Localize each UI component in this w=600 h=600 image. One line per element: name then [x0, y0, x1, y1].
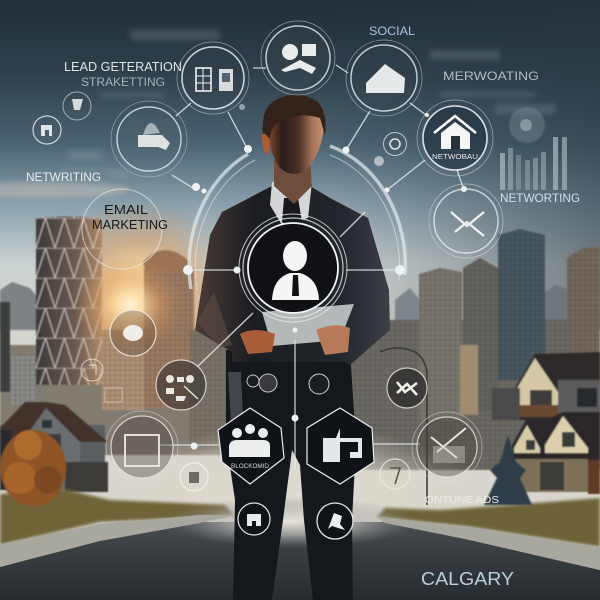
right houses: [492, 352, 600, 494]
bar chart: [500, 137, 567, 190]
upper house: [492, 352, 600, 420]
left house: [0, 402, 108, 492]
small node: upper left: [63, 92, 91, 120]
buildings right: [419, 229, 600, 420]
connector lines: [160, 65, 464, 470]
label: social: SOCIAL: [369, 26, 416, 38]
globe icon: [509, 107, 545, 143]
road: [0, 496, 600, 600]
building: saucer tower: [143, 250, 194, 408]
connector nodes: [183, 104, 467, 450]
label: networking left: NETWRITING: [26, 172, 101, 184]
inner arc: [195, 155, 400, 290]
label: inner: NETWOBAU: [432, 152, 478, 161]
legs: [226, 350, 356, 600]
label: email marketing: EMAIL: [104, 202, 148, 217]
distant mountains: [0, 282, 600, 330]
large arc: [189, 146, 405, 289]
building: diamond tower: [36, 216, 102, 385]
small node: right top: [384, 132, 406, 156]
torso and arms: [195, 186, 390, 365]
label: networking right: NETWORTING: [500, 193, 580, 205]
icon: flow: [166, 375, 198, 401]
icon: person: [272, 241, 319, 300]
grass left: [0, 488, 235, 545]
node: lead generation: [177, 42, 249, 114]
city skyline: [0, 216, 600, 470]
neck: [274, 160, 312, 204]
label: email marketing: MARKETING: [92, 217, 168, 232]
fir tree: [484, 435, 532, 505]
sidewalk right: [377, 517, 600, 570]
node: workflow: [156, 360, 206, 410]
node: bottom left: [238, 503, 270, 535]
decorative data scribbles: upper left: [62, 30, 555, 178]
small line icon: [105, 388, 122, 402]
central profile badge: [239, 214, 347, 322]
grass right: [377, 498, 600, 547]
icon: key: [41, 125, 52, 136]
hand left: [240, 330, 275, 354]
node: left middle: [111, 101, 187, 177]
node: social: [346, 40, 422, 116]
tablet: [262, 304, 354, 346]
label: calgary: CALGARY: [421, 569, 514, 589]
label: lead generation: LEAD GETERATION: [64, 59, 182, 74]
node: bottom right: [317, 503, 353, 539]
lamp post: [380, 348, 427, 505]
sidewalk left: [0, 515, 235, 567]
left mid city: [0, 345, 230, 455]
node: online ads: [412, 412, 482, 482]
node: chart line: [429, 184, 503, 258]
node: team hexagon: [218, 408, 284, 484]
label: merwoating: MERWOATING: [443, 71, 539, 83]
label: online ads: ONTUNE ADS: [425, 494, 499, 506]
icon: white house: [434, 116, 476, 149]
icon: tool: [72, 99, 83, 110]
label: team: BLOCKOMID: [231, 464, 270, 470]
icon: people and chat: [281, 44, 316, 74]
small node: lock: [180, 463, 208, 491]
small node: left: [33, 116, 61, 144]
right mid city: [350, 320, 600, 470]
small node: building outline: [81, 359, 103, 381]
sun glare over city: [75, 257, 185, 353]
shirt and tie: [270, 182, 312, 232]
lower house: [512, 412, 600, 494]
man: [195, 95, 390, 600]
icon: cross plan: [431, 428, 466, 458]
node: infinity: [387, 368, 427, 408]
icon: zigzag: [451, 212, 484, 236]
node: warm face icon: [110, 310, 156, 356]
autumn tree: [0, 430, 66, 506]
node: email: [82, 189, 168, 269]
label: email marketing: [92, 202, 168, 232]
icon: team: [229, 424, 270, 457]
icon: house: [366, 64, 405, 93]
icon: document with pen: [138, 135, 170, 150]
label: strategy: STRAKETTING: [81, 77, 165, 89]
haze above ground: [95, 425, 495, 595]
icon: plan: [125, 435, 159, 466]
icon: mask: [123, 325, 143, 341]
node: top centre: [261, 21, 335, 95]
icon: listing: [323, 428, 362, 462]
hand right: [316, 325, 350, 355]
node: listing hexagon: [307, 408, 374, 484]
icon: building plans: [196, 68, 233, 91]
head: [262, 95, 326, 174]
small node: script: [380, 459, 410, 489]
node: networking house: [417, 100, 493, 176]
node: floorplan: [106, 411, 178, 483]
small node: leg icons: [247, 374, 329, 394]
